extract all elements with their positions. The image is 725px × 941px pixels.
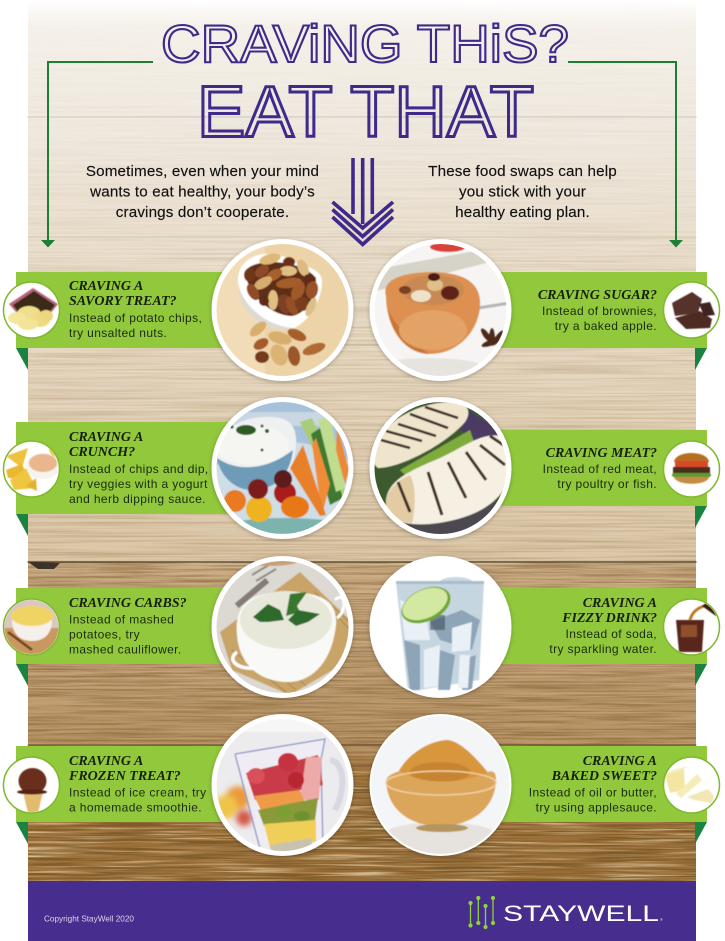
heading: SAVORY TREAT? [69,294,176,309]
body text: and herb dipping sauce. [69,492,206,506]
intro text right: healthy eating plan. [455,204,590,221]
banner [490,588,707,664]
body text: potatoes, try [69,628,140,642]
panel: baked sweet [370,714,720,856]
heading: FIZZY DRINK? [561,611,657,626]
ribbon fold [16,348,28,370]
ribbon fold [16,822,28,844]
footer band [28,881,696,941]
ribbon fold [695,664,707,686]
photo: baked apple [370,239,512,381]
body text: a homemade smoothie. [69,800,202,814]
heading: CRUNCH? [69,445,135,460]
body text: Instead of potato chips, [69,311,202,325]
intro text right: you stick with your [459,184,586,200]
copyright text: Copyright StayWell 2020 [44,914,134,924]
body text: Instead of soda, [566,627,657,641]
icon: mashed potatoes [3,598,61,656]
intro text right: These food swaps can help [428,163,617,180]
body text: Instead of mashed [69,612,174,626]
heading: CRAVING A [583,754,657,769]
banner [16,746,236,822]
banner [490,430,707,506]
photo: sparkling water [370,556,512,698]
intro text left: cravings don’t cooperate. [116,204,289,221]
body text: try unsalted nuts. [69,326,167,340]
panel: sugar [370,239,720,381]
ribbon fold [695,348,707,370]
icon: ice cream cone [4,757,60,813]
panel: savory treat [4,239,354,381]
icon: potato chips [4,282,60,338]
panel: crunch [4,397,365,539]
icon: butter [664,757,720,813]
body text: mashed cauliflower. [69,642,182,656]
panel: fizzy drink [370,556,722,698]
icon: cola glass [664,598,722,655]
icon: chips and dip [4,441,60,497]
logo mark [468,896,495,929]
body text: try veggies with a yogurt [69,477,208,491]
panel: meat [370,397,720,539]
banner [490,272,707,348]
body text: Instead of oil or butter, [529,786,657,800]
banner [16,272,236,348]
title: craving this: CRAViNG THiS? [161,15,569,74]
body text: try a baked apple. [555,319,657,333]
heading: CRAVING CARBS? [69,596,187,611]
photo: mixed nuts in bowl [212,239,354,381]
intro text left: Sometimes, even when your mind [86,163,319,180]
banner [16,422,236,514]
logo wordmark: STAYWELL [503,901,659,926]
panel: carbs [3,554,354,698]
heading: CRAVING MEAT? [546,446,657,461]
arrow: right green [568,62,683,248]
ribbon fold [695,506,707,528]
body text: Instead of ice cream, try [69,786,207,800]
arrow: left green [41,62,153,248]
body text: try poultry or fish. [557,477,657,491]
icon: burger [664,441,720,497]
heading: CRAVING A [583,596,657,611]
intro text left: wants to eat healthy, your body’s [89,184,315,200]
heading: CRAVING SUGAR? [538,288,657,303]
logo: staywell [468,896,663,929]
photo: dip and vegetables [205,397,365,539]
heading: CRAVING A [69,754,143,769]
body text: Instead of red meat, [543,462,657,476]
ribbon fold [16,514,28,536]
panel: frozen treat [4,714,354,856]
banner [490,746,707,822]
body text: try using applesauce. [536,800,657,814]
photo: mashed cauliflower [212,554,354,698]
photo: grilled chicken [370,397,512,539]
body text: Instead of chips and dip, [69,462,209,476]
banner [16,588,236,664]
arrow: purple striped down arrow [332,158,393,244]
heading: BAKED SWEET? [551,769,657,784]
photo: applesauce in glass bowl [370,714,512,856]
title: eat that: EAT THAT [197,72,534,152]
heading: FROZEN TREAT? [68,769,181,784]
ribbon fold [16,664,28,686]
heading: CRAVING A [69,279,143,294]
body text: Instead of brownies, [542,304,657,318]
photo: fruit smoothie in blender [212,714,354,856]
heading: CRAVING A [69,430,143,445]
icon: brownies [664,282,720,338]
ribbon fold [695,822,707,844]
body text: try sparkling water. [549,642,657,656]
registered mark: ® [660,917,663,922]
